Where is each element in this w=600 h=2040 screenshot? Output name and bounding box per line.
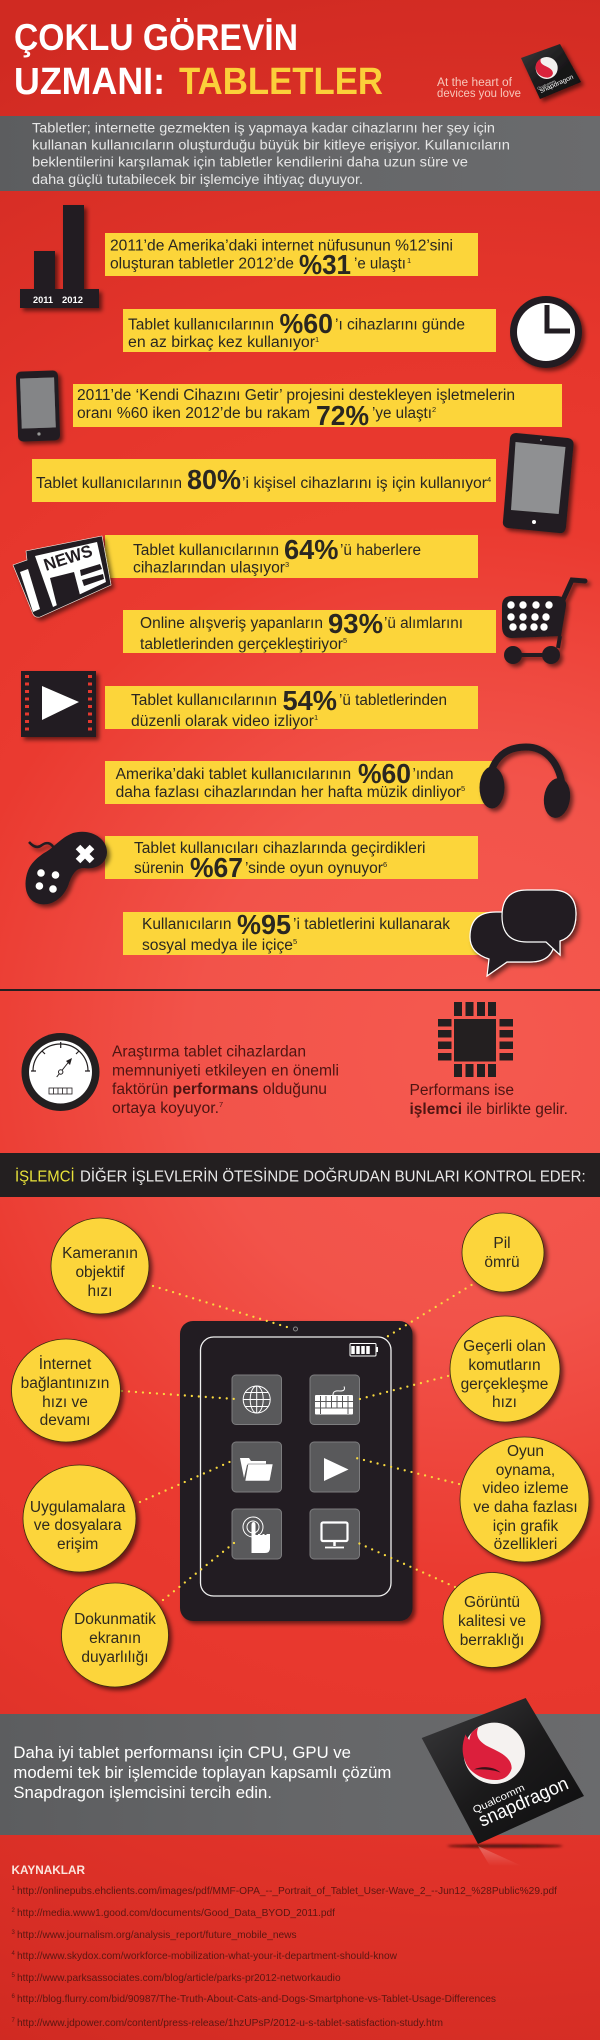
stat 7 box: Tablet kullanıcılarının	[131, 692, 277, 709]
icon: keyboard app	[310, 1375, 360, 1424]
stat 5 box: 3	[285, 560, 289, 569]
logo: small snapdragon chip: snapdragon	[539, 74, 575, 95]
stat 2 box: Tablet kullanıcılarının	[128, 316, 274, 333]
sources list: 5	[12, 1973, 16, 1979]
bubble: camera: hızı	[88, 1283, 112, 1300]
stat 2 box: en az birkaç kez kullanıyor	[128, 334, 315, 351]
bubble: apps and files: Uygulamalara	[30, 1499, 126, 1516]
stat 6 box: tabletlerinden gerçekleştiriyor	[140, 636, 343, 653]
performance text	[112, 1044, 339, 1117]
stat 7 box: düzenli olarak video izliyor	[131, 713, 314, 730]
icon: globe app	[232, 1375, 282, 1424]
heading band	[0, 1153, 600, 1197]
title	[14, 17, 383, 103]
stat 9 box: 6	[383, 860, 387, 869]
sources list: 2	[12, 1908, 16, 1914]
icon: monitor app	[310, 1509, 360, 1559]
icon: newspaper: NEWS	[41, 541, 95, 575]
call to action band: modemi tek bir işlemcide toplayan kapsamlı çözüm	[13, 1763, 391, 1782]
sources list: http://www.parksassociates.com/blog/article/parks-pr2012-networkaudio	[17, 1973, 341, 1984]
icon: processor chip	[438, 1002, 513, 1077]
icon: game controller	[26, 832, 107, 904]
bubble: graphics	[460, 1437, 589, 1562]
performance text: memnuniyeti etkileyen en önemli	[112, 1063, 339, 1080]
bubble: graphics: oynama,	[496, 1462, 555, 1479]
stat 1 box: 1	[407, 256, 411, 265]
divider	[0, 989, 600, 991]
bubble: camera: Kameranın	[62, 1245, 138, 1262]
dotted connector lines	[122, 1285, 472, 1600]
bubble: battery life	[462, 1213, 544, 1292]
bubble: apps and files	[23, 1465, 136, 1572]
icon: headphones	[480, 747, 573, 820]
stat 1 box: %31	[299, 249, 351, 280]
bubble: commands: Geçerli olan	[463, 1338, 546, 1355]
processor text: işlemci ile birlikte gelir.	[410, 1101, 568, 1118]
call to action band	[0, 1714, 600, 1835]
stat 6 box: 93%	[328, 608, 383, 639]
stat 10 box: 5	[293, 937, 297, 946]
sources list: http://onlinepubs.ehclients.com/images/pdf/MMF-OPA_--_Portrait_of_Tablet_User-Wave_2_--Jun12_%28Public%29.pdf	[17, 1886, 557, 1897]
icon: bar chart 2011 2012: 2012	[62, 295, 83, 306]
icon: touch app	[232, 1509, 282, 1559]
sources list: 6	[12, 1994, 16, 2000]
sources list: http://www.jdpower.com/content/press-release/1hzUPsP/2012-u-s-tablet-satisfaction-study.htm	[17, 2018, 443, 2029]
stat 9 box: sürenin	[134, 860, 184, 877]
bubble: graphics: Oyun	[507, 1443, 544, 1460]
icon: clock	[510, 296, 582, 368]
intro band: Tabletler; internette gezmekten iş yapmaya kadar cihazlarını her şey için	[32, 120, 495, 136]
stat 2 box: 1	[315, 335, 319, 344]
stat 8 box: %60	[358, 758, 411, 789]
stat 3 box: 72%	[316, 400, 369, 431]
icon: newspaper	[13, 536, 111, 617]
icon: battery	[350, 1344, 378, 1356]
stat 8 box: Amerika’daki tablet kullanıcılarının	[116, 766, 351, 783]
sources list	[12, 1886, 557, 2029]
stat 7 box: ’ü tabletlerinden	[339, 692, 447, 709]
bubble: battery life: Pil	[493, 1235, 511, 1252]
bubble: internet: hızı ve	[42, 1394, 88, 1411]
bubble: touch screen: ekranın	[89, 1630, 141, 1647]
stat 7 box: 1	[314, 713, 318, 722]
bubble: battery life: ömrü	[484, 1254, 520, 1271]
bubble: touch screen: Dokunmatik	[74, 1611, 156, 1628]
stat 3 box	[73, 384, 562, 431]
icon: folder app	[232, 1442, 282, 1492]
stat 6 box: 5	[343, 636, 347, 645]
title: UZMANI:	[14, 61, 165, 103]
stat 4 box: Tablet kullanıcılarının	[36, 475, 182, 492]
bubble: commands: hızı	[492, 1394, 517, 1411]
bubble: display: berraklığı	[460, 1632, 524, 1649]
tagline	[437, 77, 521, 100]
stat 10 box: Kullanıcıların	[142, 916, 232, 933]
logo: large snapdragon chip: snapdragon	[475, 1773, 572, 1832]
bubble: internet: bağlantınızın	[21, 1375, 109, 1392]
heading band: İŞLEMCİ	[15, 1167, 75, 1186]
bubble: apps and files: ve dosyalara	[34, 1517, 122, 1534]
logo: small snapdragon chip: Qualcomm	[536, 78, 557, 91]
bubble: internet: İnternet	[39, 1355, 92, 1373]
performance text: ortaya koyuyor.	[112, 1100, 219, 1117]
logo: small snapdragon chip	[521, 44, 581, 99]
sources list: http://www.journalism.org/analysis_report/future_mobile_news	[17, 1930, 297, 1941]
title: TABLETLER	[179, 61, 383, 103]
bubble: internet	[12, 1339, 120, 1442]
stat 4 box: 80%	[187, 464, 241, 495]
stat 4 box	[32, 459, 496, 502]
icon: tablet	[503, 433, 574, 533]
stat 5 box: cihazlarından ulaşıyor	[133, 560, 285, 577]
call to action band: Snapdragon işlemcisini tercih edin.	[13, 1783, 272, 1802]
performance text: faktörün performans olduğunu	[112, 1081, 327, 1098]
call to action band: Daha iyi tablet performansı için CPU, GPU ve	[13, 1743, 351, 1762]
stat 6 box: Online alışveriş yapanların	[140, 615, 323, 632]
bubble: commands	[450, 1316, 560, 1422]
stat 8 box: daha fazlası cihazlarından her hafta müzik dinliyor	[116, 784, 461, 801]
stat 5 box: 64%	[284, 534, 339, 565]
processor text	[410, 1082, 568, 1118]
bubble: touch screen: duyarlılığı	[81, 1649, 149, 1666]
intro band	[0, 116, 600, 191]
tablet diagram	[180, 1321, 412, 1621]
icon: bar chart 2011 2012	[20, 205, 99, 308]
bubble: graphics: ve daha fazlası	[473, 1499, 578, 1516]
logo: large snapdragon chip	[422, 1698, 584, 1866]
bubble: apps and files: erişim	[57, 1536, 98, 1553]
icon: bar chart 2011 2012: 2011	[33, 295, 54, 306]
sources list: http://www.skydox.com/workforce-mobilization-what-your-it-department-should-know	[17, 1951, 397, 1962]
processor text: Performans ise	[410, 1082, 514, 1099]
tagline: At the heart of	[437, 77, 513, 89]
stat 10 box: ’i tabletlerini kullanarak	[293, 916, 450, 933]
stat 5 box: ’ü haberlere	[340, 542, 421, 559]
stat 9 box: ’sinde oyun oynuyor	[245, 860, 383, 877]
icon: play app	[310, 1442, 360, 1492]
bubble: graphics: özellikleri	[494, 1536, 557, 1553]
stat 4 box: 4	[487, 475, 491, 484]
stat 7 box	[105, 685, 478, 730]
bubble: camera: objektif	[75, 1264, 125, 1281]
icon: shopping cart	[502, 580, 585, 664]
intro band: daha güçlü tutabilecek bir işlemciye ihtiyaç duyuyor.	[32, 171, 363, 187]
bubble: commands: komutların	[468, 1357, 541, 1374]
bubble: display	[443, 1572, 541, 1668]
bubble: internet: devamı	[40, 1412, 90, 1429]
stat 3 box: oranı %60 iken 2012’de bu rakam	[77, 405, 310, 422]
intro band: beklentilerini karşılamak için tabletler kendilerini daha uzun süre ve	[32, 154, 468, 170]
stat 6 box: ’ü alımlarını	[384, 615, 463, 632]
sources list: 7	[12, 2018, 16, 2024]
stat 10 box: %95	[237, 909, 291, 940]
stat 6 box	[123, 608, 496, 653]
bubble: graphics: video izleme	[482, 1480, 569, 1497]
stat 8 box: ’ından	[412, 766, 454, 783]
stat 1 box: oluşturan tabletler 2012’de	[110, 256, 294, 273]
logo: large snapdragon chip: Qualcomm	[471, 1783, 527, 1816]
icon: speech bubbles	[470, 890, 576, 976]
bubble: display: kalitesi ve	[458, 1613, 526, 1630]
stat 8 box	[105, 758, 492, 804]
sources heading: KAYNAKLAR	[12, 1863, 85, 1877]
stat 3 box: 2011’de ‘Kendi Cihazını Getir’ projesini destekleyen işletmelerin	[77, 387, 515, 404]
stat 8 box: 5	[461, 784, 465, 793]
sources list: 1	[12, 1886, 16, 1892]
stat 2 box: %60	[280, 308, 333, 339]
sources list: http://blog.flurry.com/bid/90987/The-Truth-About-Cats-and-Dogs-Smartphone-vs-Tablet-Usage-Differences	[17, 1994, 496, 2005]
stat 10 box	[123, 909, 490, 955]
sources list: http://media.www1.good.com/documents/Good_Data_BYOD_2011.pdf	[17, 1908, 335, 1919]
stat 9 box: Tablet kullanıcıları cihazlarında geçirdikleri	[134, 840, 426, 857]
performance text: 7	[219, 1100, 223, 1109]
stat 5 box: Tablet kullanıcılarının	[133, 542, 279, 559]
stat 5 box	[105, 534, 478, 578]
stat 3 box: ’ye ulaştı	[372, 405, 432, 422]
icon: video film strip	[21, 671, 96, 737]
bubble: commands: gerçekleşme	[461, 1376, 548, 1393]
stat 2 box: ’ı cihazlarını günde	[335, 316, 465, 333]
stat 2 box	[123, 308, 496, 352]
icon: performance gauge	[22, 1033, 100, 1111]
stat 9 box	[105, 836, 478, 883]
icon: smartphone	[16, 370, 60, 442]
bubble: graphics: için grafik	[493, 1518, 558, 1535]
bubble: touch screen	[62, 1583, 168, 1687]
stat 1 box: 2011’de Amerika’daki internet nüfusunun %12’sini	[110, 238, 453, 255]
sources list: 4	[12, 1951, 16, 1957]
stat 1 box: ’e ulaştı	[354, 256, 406, 273]
title: ÇOKLU GÖREVİN	[14, 17, 298, 58]
stat 1 box	[105, 233, 478, 280]
stat 3 box: 2	[432, 405, 436, 414]
performance text: Araştırma tablet cihazlardan	[112, 1044, 306, 1061]
stat 7 box: 54%	[282, 685, 337, 716]
sources list: 3	[12, 1930, 16, 1936]
bubble: camera	[51, 1218, 149, 1314]
bubble: display: Görüntü	[464, 1594, 520, 1611]
stat 4 box: ’i kişisel cihazlarını iş için kullanıyor	[242, 475, 487, 492]
intro band: kullanan kullanıcıların oluşturduğu büyük bir kitleye erişiyor. Kullanıcıların	[32, 137, 510, 153]
tagline: devices you love	[437, 88, 521, 100]
stat 9 box: %67	[190, 852, 243, 883]
stat 10 box: sosyal medya ile içiçe	[142, 937, 293, 954]
